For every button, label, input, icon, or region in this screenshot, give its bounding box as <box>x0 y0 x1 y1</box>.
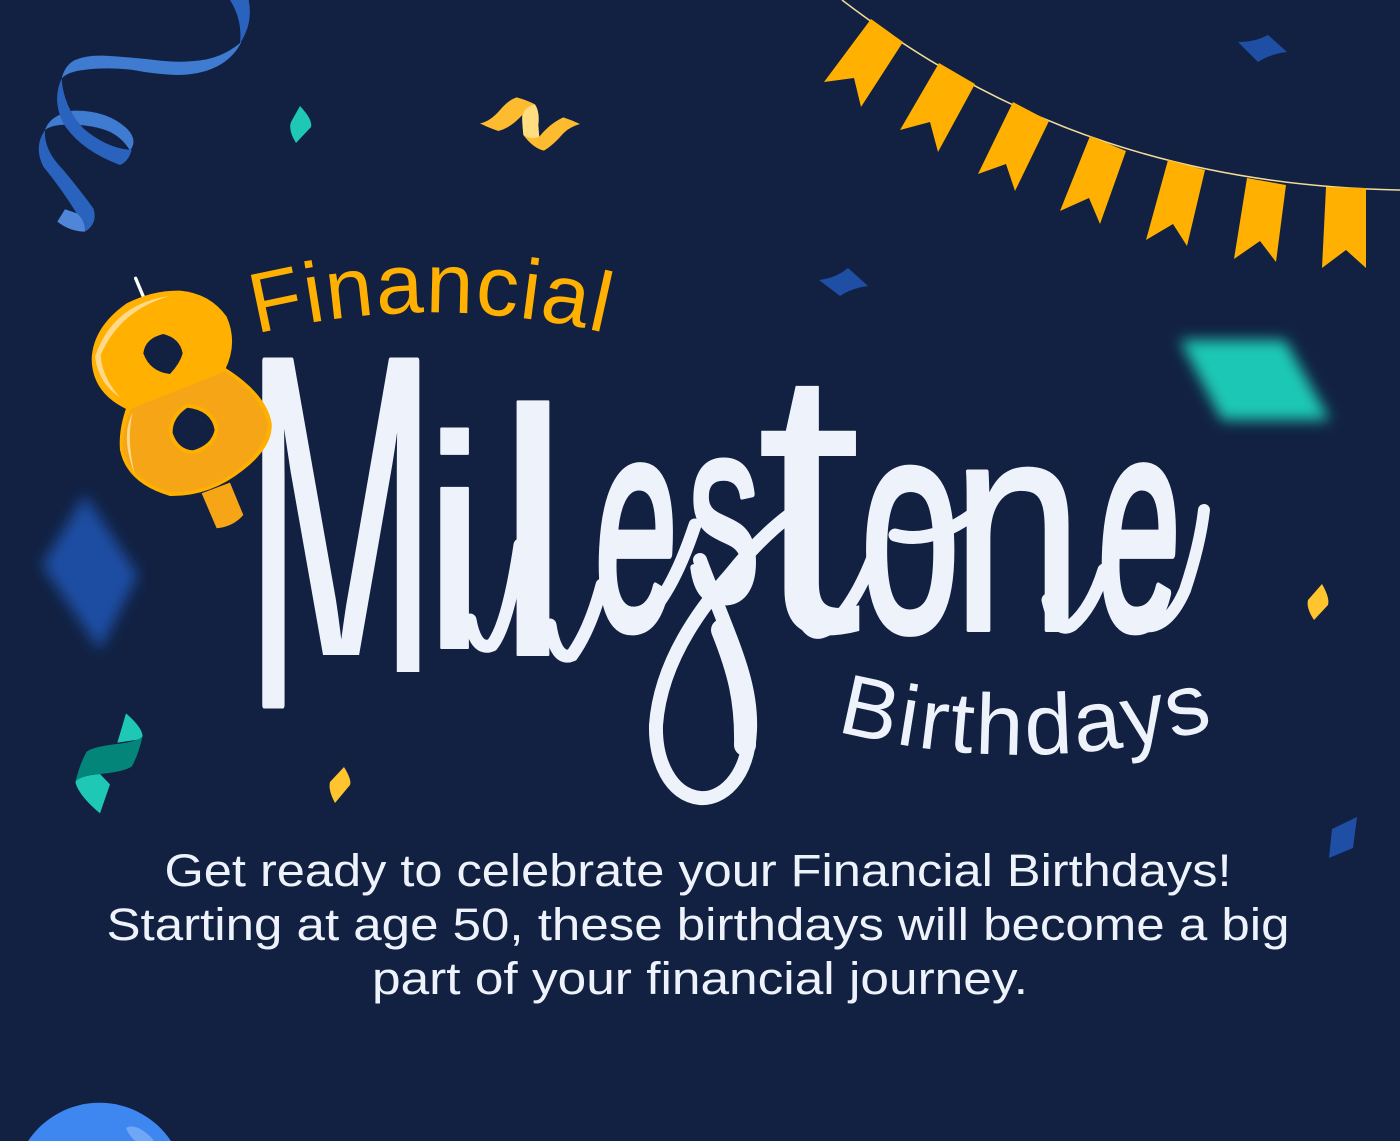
intro text: part of your financial journey. <box>372 953 1028 1004</box>
heading: Milestone: l <box>494 339 572 730</box>
heading: Milestone: t <box>756 288 863 713</box>
confetti: yellow lower left <box>330 767 350 803</box>
intro text: Starting at age 50, these birthdays will become a big <box>106 899 1290 950</box>
bunting string <box>842 0 1400 190</box>
intro text: Get ready to celebrate your Financial Birthdays! <box>164 845 1232 896</box>
streamer: blue ribbon <box>39 0 250 232</box>
confetti: blue middle <box>819 268 868 296</box>
heading: Financial: Financial <box>250 257 612 332</box>
confetti: blue lower right <box>1329 817 1357 858</box>
bunting flags <box>824 19 1366 268</box>
confetti: blue top right <box>1238 35 1287 62</box>
intro text <box>106 845 1290 1004</box>
icon: birthday candle 8 <box>92 278 272 528</box>
confetti: blurred blue <box>42 495 138 650</box>
heading: Milestone: i <box>421 375 488 713</box>
balloon <box>28 1103 171 1141</box>
heading: Birthdays: Birthdays <box>842 675 1208 764</box>
confetti: teal top <box>290 106 311 143</box>
heading: Milestone: M <box>245 254 437 812</box>
confetti: yellow right <box>1308 584 1328 620</box>
flourish: connecting strokes and s loop of Milestone <box>470 510 1204 798</box>
confetti: blurred teal <box>1180 340 1330 420</box>
heading: Milestone: e <box>1091 358 1190 693</box>
confetti: teal ribbon <box>76 713 143 813</box>
heading: Milestone: e <box>588 358 687 693</box>
confetti: yellow squiggle <box>480 97 580 151</box>
heading: Milestone: s <box>688 366 759 656</box>
heading: Milestone <box>262 358 1176 708</box>
heading: Milestone: o <box>861 360 959 695</box>
heading: Milestone: n <box>952 359 1082 695</box>
